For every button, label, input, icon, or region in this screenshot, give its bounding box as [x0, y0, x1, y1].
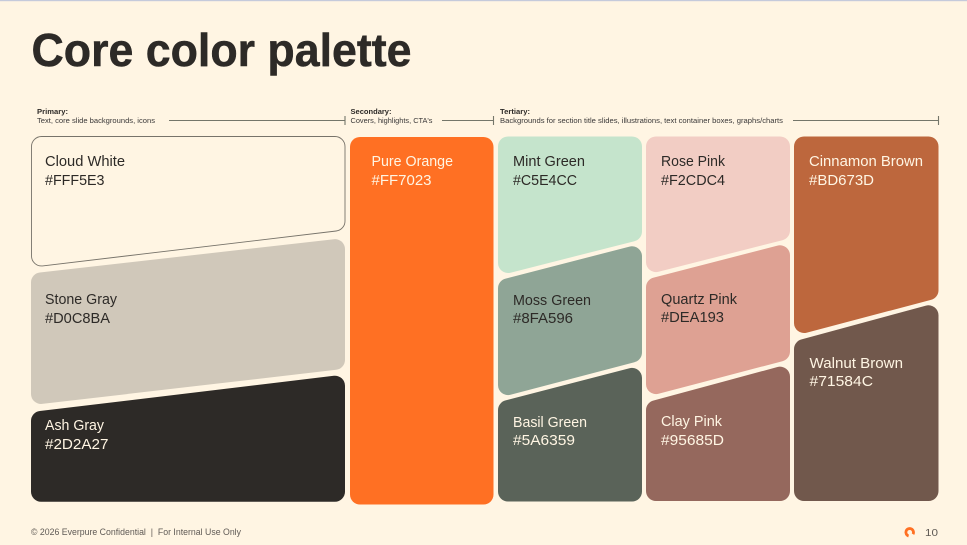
legend: primary: Primary: — [37, 109, 68, 116]
swatch: Quartz Pink: #DEA193 — [661, 309, 724, 326]
swatch: Ash Gray: #2D2A27 — [45, 436, 108, 453]
swatch: Rose Pink — [646, 136, 790, 272]
swatch: Pure Orange: #FF7023 — [372, 172, 432, 189]
swatch: Walnut Brown: #71584C — [810, 373, 873, 390]
legend: primary: Text, core slide backgrounds, icons — [37, 118, 156, 125]
legend: secondary: Covers, highlights, CTA's — [350, 118, 433, 125]
swatch: Cinnamon Brown — [794, 136, 938, 333]
swatch: Cloud White: Cloud White — [45, 153, 125, 170]
swatch: Cinnamon Brown: Cinnamon Brown — [809, 153, 923, 170]
swatch: Walnut Brown — [794, 305, 938, 501]
swatch: Mint Green — [498, 136, 642, 273]
swatch: Clay Pink: Clay Pink — [661, 413, 722, 430]
swatch: Ash Gray — [31, 376, 345, 502]
legend: primary — [37, 109, 345, 125]
footer: copyright: © 2026 Everpure Confidential | For Internal Use Only — [31, 527, 242, 537]
swatch: Rose Pink: Rose Pink — [661, 153, 725, 170]
icon: orange logo — [906, 529, 913, 536]
swatch: Basil Green: Basil Green — [513, 414, 587, 431]
legend: secondary — [350, 109, 494, 125]
legend: secondary: Secondary: — [350, 109, 392, 116]
swatch: Quartz Pink: Quartz Pink — [661, 291, 737, 308]
legend: tertiary — [500, 109, 938, 125]
swatch: Cloud White — [32, 136, 345, 266]
swatch: Mint Green: Mint Green — [513, 153, 585, 170]
swatch: Pure Orange — [350, 137, 494, 504]
swatch: Rose Pink: #F2CDC4 — [661, 172, 725, 189]
swatch: Basil Green: #5A6359 — [513, 432, 575, 449]
swatch: Walnut Brown: Walnut Brown — [810, 355, 903, 372]
swatch: Moss Green — [498, 246, 642, 395]
swatch: Clay Pink: #95685D — [661, 432, 724, 449]
page number: 10 — [925, 527, 938, 539]
swatch: Mint Green: #C5E4CC — [513, 172, 577, 189]
swatch: Cinnamon Brown: #BD673D — [809, 172, 874, 189]
legend: tertiary: Backgrounds for section title slides, illustrations, text container boxes, graphs/charts — [500, 118, 784, 125]
swatch: Stone Gray: #D0C8BA — [45, 310, 110, 327]
swatch: Moss Green: #8FA596 — [513, 310, 573, 327]
swatch: Moss Green: Moss Green — [513, 292, 591, 309]
swatch: Basil Green — [498, 368, 642, 502]
swatch: Quartz Pink — [646, 245, 790, 394]
title: Core color palette — [32, 24, 412, 76]
swatch: Pure Orange: Pure Orange — [372, 153, 453, 170]
swatch: Stone Gray: Stone Gray — [45, 291, 117, 308]
swatch: Clay Pink — [646, 367, 790, 501]
swatch: Stone Gray — [31, 239, 345, 404]
swatch: Ash Gray: Ash Gray — [45, 417, 104, 434]
swatch: Cloud White: #FFF5E3 — [45, 172, 104, 189]
legend: tertiary: Tertiary: — [500, 109, 530, 116]
